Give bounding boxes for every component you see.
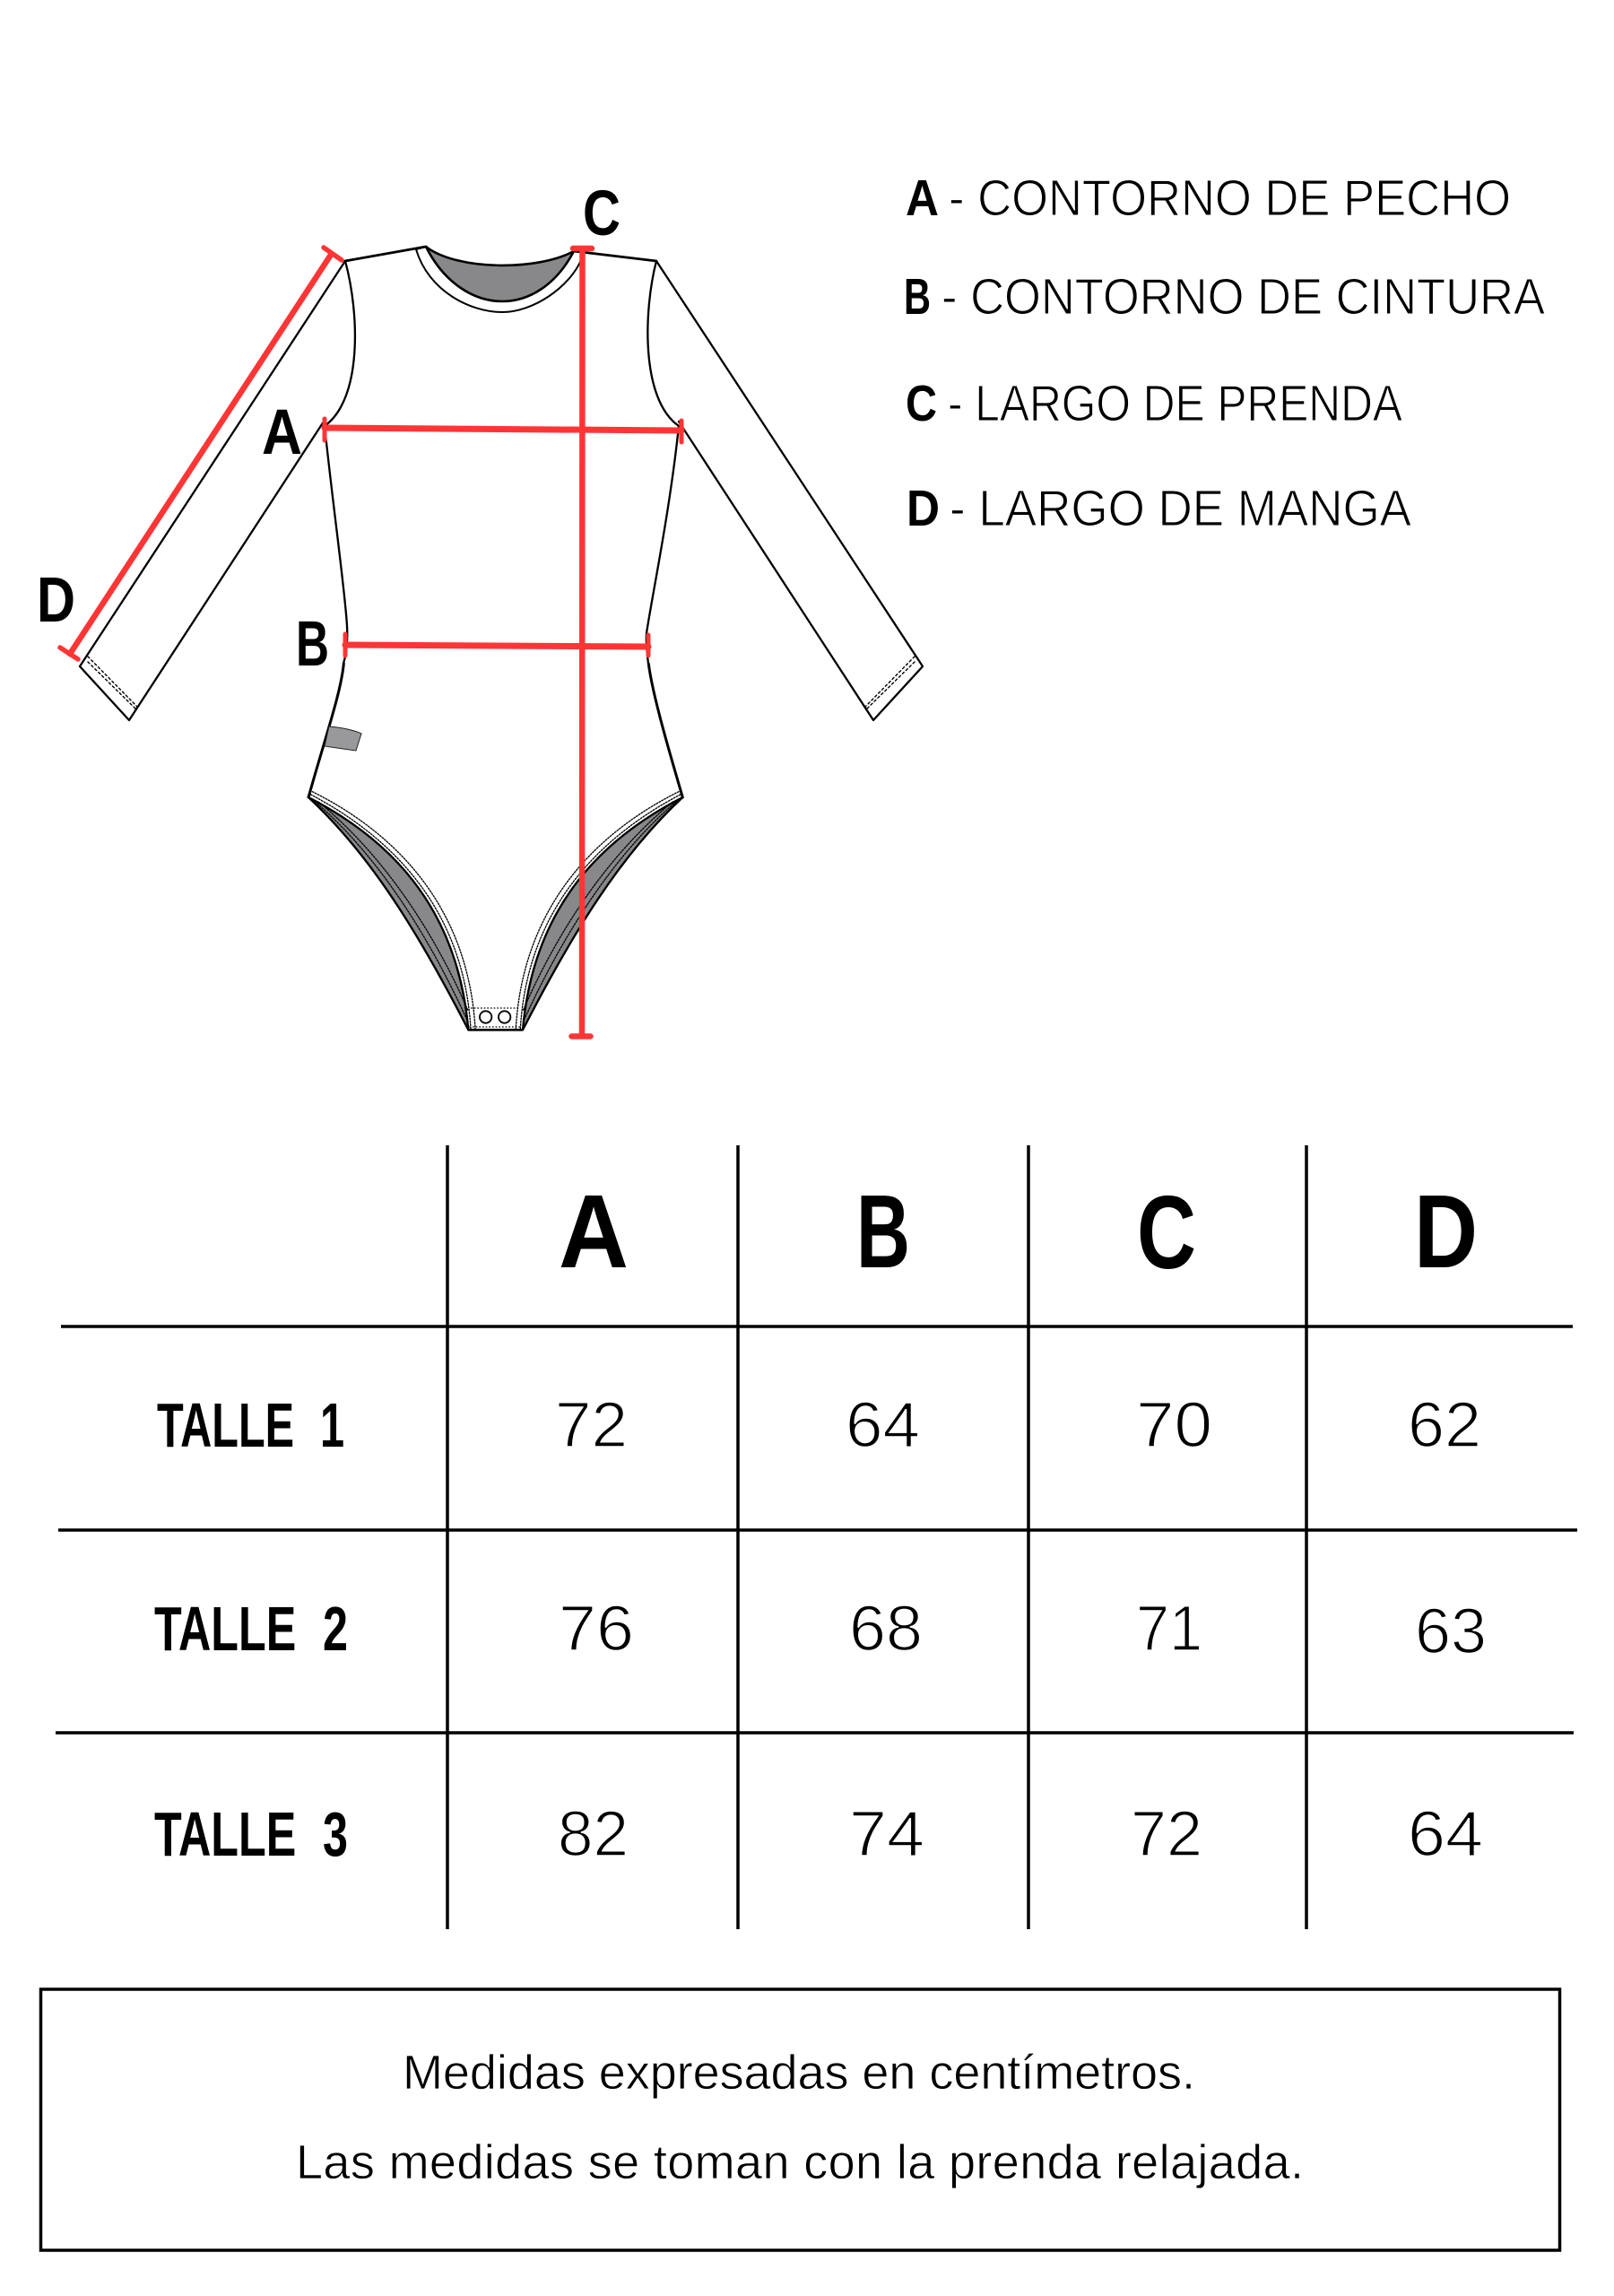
legend item B: B [904,268,931,326]
table row: talle 1 [157,1390,1481,1461]
note line 2: Las medidas se toman con la prenda relajada. [296,2135,1304,2189]
table header letters [559,1173,1478,1291]
table grid [56,1145,1577,1929]
table row: talle 3: 74 [849,1799,924,1870]
size table [56,1145,1577,1929]
diagram letter A: A [262,397,302,468]
table row: talle 1: 70 [1136,1390,1212,1461]
legend: measurement names [904,170,1545,537]
table row: talle 3: 72 [1131,1799,1202,1870]
legend item C: - LARGO DE PRENDA [948,375,1402,432]
diagram letter B: B [296,609,329,680]
table row: talle 2: 76 [559,1594,634,1665]
legend item D: - LARGO DE MANGA [950,480,1411,537]
table row: talle 3: 64 [1408,1799,1483,1870]
note box [41,1989,1560,2250]
legend item D: D [907,480,940,537]
table header letters: C [1137,1174,1196,1291]
table row: talle 3 [154,1799,1483,1870]
measurement line B [345,634,648,656]
table row: talle 1: 64 [846,1390,920,1461]
legend item A: - CONTORNO DE PECHO [949,170,1511,227]
table header letters: B [856,1173,910,1290]
table row: talle 1: 72 [555,1390,628,1461]
diagram letter C: C [583,178,620,249]
table row: talle 2: 68 [849,1594,923,1665]
crotch snap closure [468,1008,522,1030]
measurement line C [572,248,592,1037]
legend item C: C [906,375,937,432]
note border [41,1989,1560,2250]
lower body right leg opening [516,664,682,1030]
table row: talle 1: 62 [1408,1390,1481,1461]
table row: talle 2: 71 [1136,1594,1202,1665]
diagram letter D: D [37,565,75,636]
table row: talle 2 [154,1594,1487,1667]
lower body left leg opening [308,664,475,1030]
note line 1: Medidas expresadas en centímetros. [403,2046,1195,2100]
legend item A: A [906,170,939,227]
right sleeve [656,261,923,720]
table row: talle 2: 63 [1415,1596,1487,1667]
care label tag [325,726,361,751]
legend item B: - CONTORNO DE CINTURA [941,268,1545,326]
table row: talle 3: 82 [558,1799,629,1870]
measurement line A [325,419,681,442]
garment flat sketch [80,247,923,720]
neckline [416,247,581,312]
measurement line D [60,248,342,659]
table header letters: D [1414,1173,1478,1290]
table header letters: A [559,1173,629,1290]
table row: talle 2: TALLE 2 [154,1594,348,1664]
table row: talle 3: TALLE 3 [154,1799,348,1869]
left sleeve [80,261,345,720]
torso outline [325,247,679,664]
diagram: bodysuit garment with measurements [37,178,923,1037]
table row: talle 1: TALLE 1 [157,1390,344,1460]
